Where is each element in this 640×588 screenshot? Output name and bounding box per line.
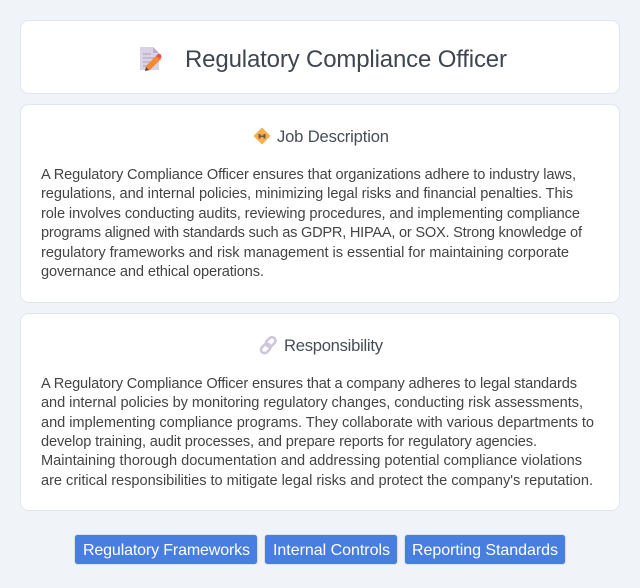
tag: regulatory frameworks: Regulatory Frameworks xyxy=(83,542,250,559)
heading: title: Regulatory Compliance Officer xyxy=(185,46,507,73)
text block: responsibility: are critical responsibilities to mitigate legal risks and protect the company's reputation. xyxy=(41,473,593,489)
heading: responsibility: Responsibility xyxy=(284,336,384,355)
icon: orange diamond xyxy=(254,128,270,144)
tag: reporting standards xyxy=(404,534,566,564)
tag: regulatory frameworks xyxy=(74,534,258,564)
text block: job description: A Regulatory Compliance Officer ensures that organizations adhere to industry laws, xyxy=(41,167,576,183)
tag: internal controls xyxy=(264,534,398,564)
text block: job description: programs aligned with standards such as GDPR, HIPAA, or SOX. Strong knowledge of xyxy=(41,225,583,241)
text block: job description: regulations, and internal policies, minimizing legal risks and financial penalties. This xyxy=(41,186,573,202)
text block: job description: role involves conducting audits, reviewing procedures, and implementing compliance xyxy=(41,206,580,222)
text block: responsibility: Maintaining thorough documentation and addressing potential compliance violations xyxy=(41,453,582,469)
panel: responsibility xyxy=(20,314,620,510)
tag: reporting standards: Reporting Standards xyxy=(412,542,558,559)
panel: title xyxy=(20,20,620,94)
text block: job description xyxy=(41,167,583,280)
text block: responsibility: A Regulatory Compliance Officer ensures that a company adheres to legal standards xyxy=(41,376,577,392)
text block: job description: regulatory frameworks and risk management is essential for maintaining corporate xyxy=(41,245,569,261)
text block: responsibility: develop training, audit processes, and prepare reports for regulatory agencies. xyxy=(41,434,537,450)
text block: job description: governance and ethical operations. xyxy=(41,264,264,280)
text block: responsibility: and implementing compliance programs. They collaborate with various departments to xyxy=(41,415,594,431)
text block: responsibility xyxy=(41,376,594,489)
heading: job description: Job Description xyxy=(277,127,389,146)
tag: internal controls: Internal Controls xyxy=(273,542,390,559)
text block: responsibility: and internal policies by monitoring regulatory changes, conducting risk assessments, xyxy=(41,395,583,411)
icon: chain link xyxy=(260,336,277,355)
panel: job description xyxy=(20,104,620,302)
icon: document with pencil xyxy=(140,47,162,71)
